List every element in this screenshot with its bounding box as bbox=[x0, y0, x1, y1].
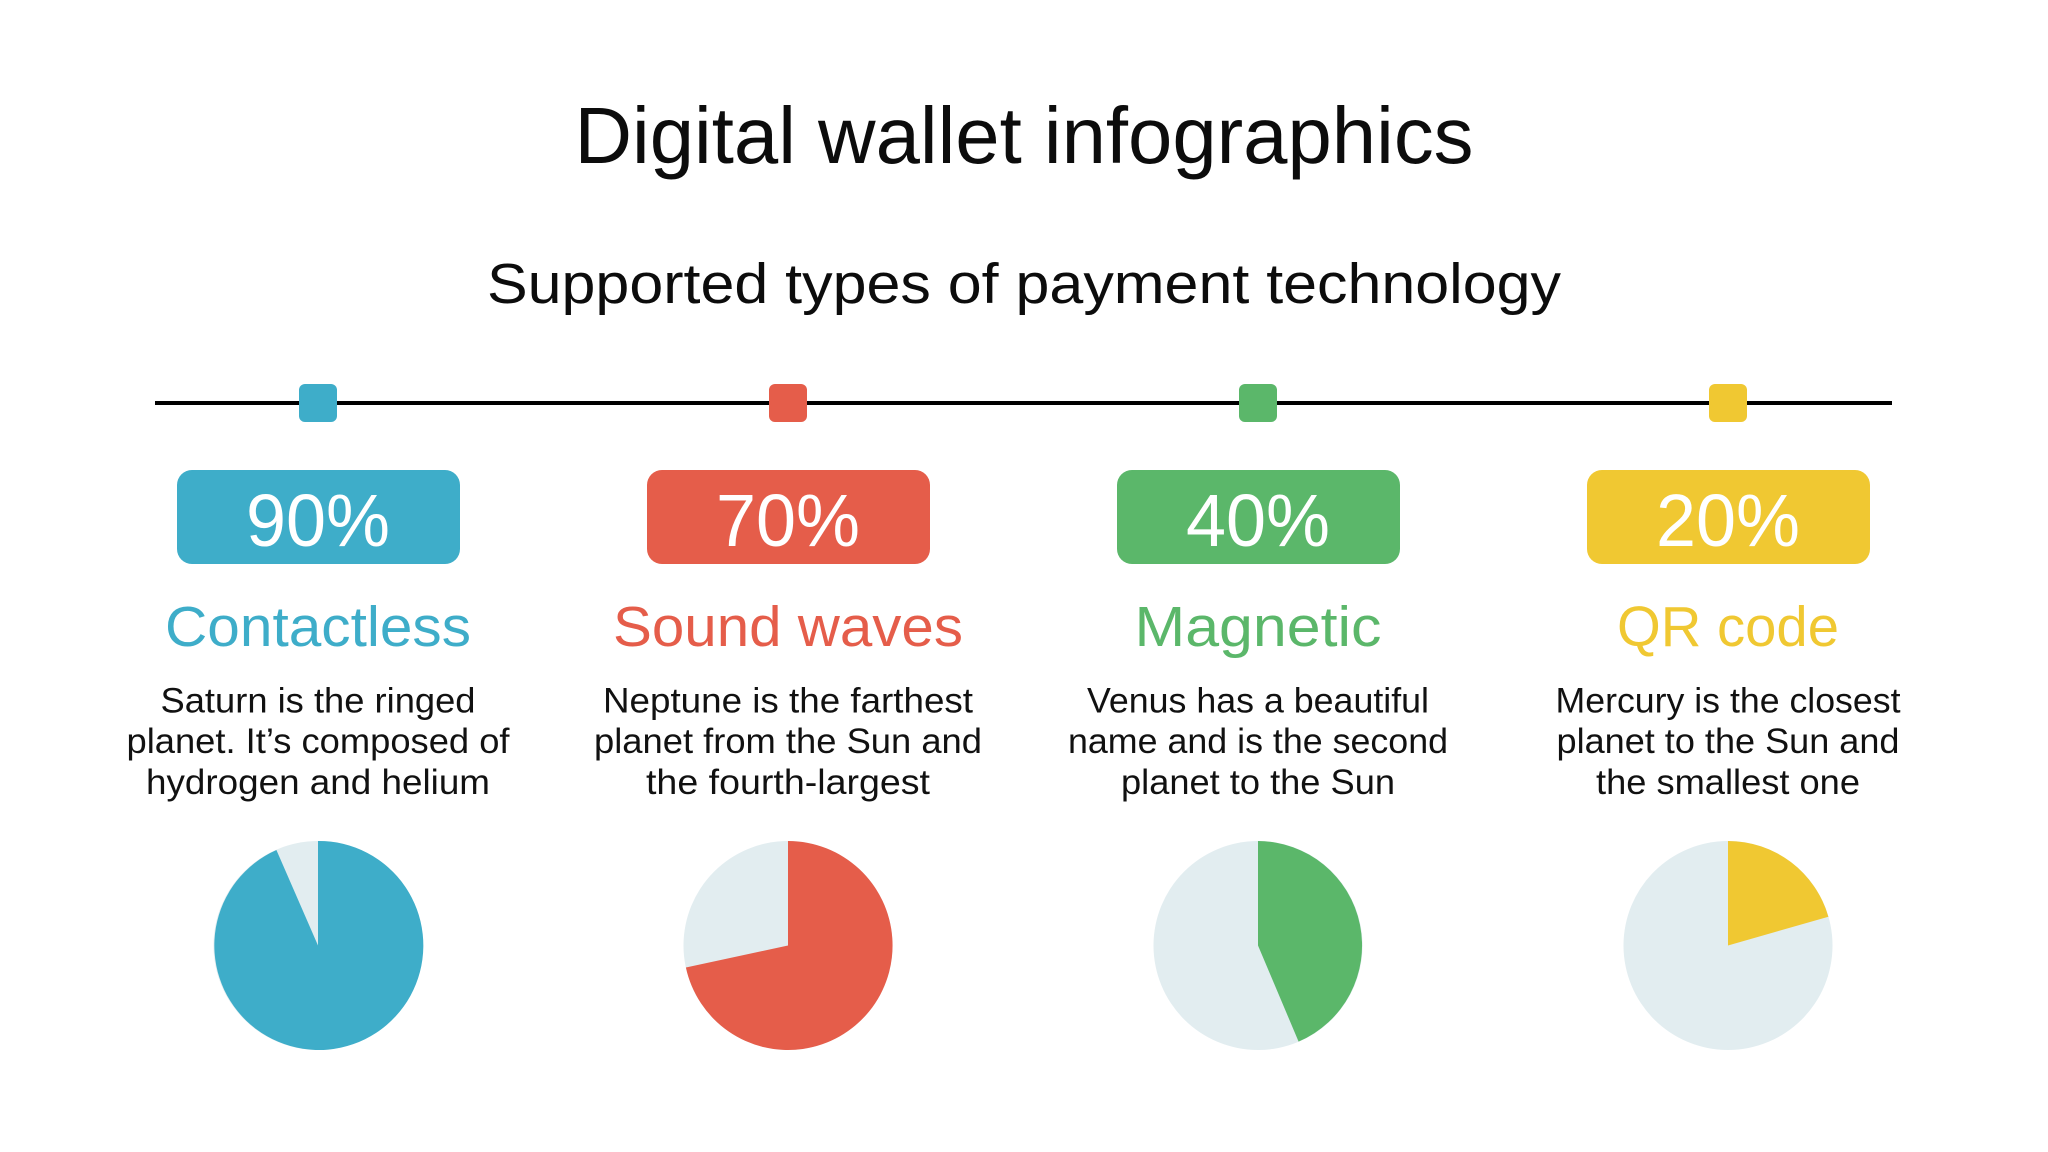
text block: Venus: planet to the Sun bbox=[1121, 763, 1395, 802]
heading: Magnetic: Magnetic bbox=[1134, 595, 1382, 659]
pie chart: 20% bbox=[1624, 841, 1832, 1050]
heading: Contactless: Contactless bbox=[165, 595, 471, 659]
percentage badge: 40%: 40% bbox=[1186, 479, 1330, 562]
text block: Neptune: Neptune is the farthest bbox=[603, 682, 973, 720]
percentage badge: 70% bbox=[647, 470, 930, 564]
text block: Neptune bbox=[594, 682, 982, 802]
text block: Saturn: hydrogen and helium bbox=[146, 763, 490, 802]
text block: Neptune: the fourth-largest bbox=[646, 763, 930, 802]
pie chart: 90% bbox=[214, 841, 423, 1050]
panel: contactless bbox=[126, 470, 510, 1050]
text block: Saturn: planet. It’s composed of bbox=[126, 722, 510, 761]
text block: Venus bbox=[1068, 682, 1448, 802]
text block: Saturn bbox=[126, 682, 510, 802]
percentage badge: 90% bbox=[177, 470, 460, 564]
text block: Venus: name and is the second bbox=[1068, 722, 1448, 761]
percentage badge: 90%: 90% bbox=[246, 479, 390, 562]
percentage badge: 40% bbox=[1117, 470, 1400, 564]
text block: Saturn: Saturn is the ringed bbox=[160, 682, 476, 720]
heading: QR code: QR code bbox=[1617, 595, 1839, 659]
text block: Mercury: the smallest one bbox=[1596, 763, 1860, 802]
subtitle: Supported types of payment technology bbox=[487, 252, 1562, 316]
panel: QR code bbox=[1556, 470, 1901, 1050]
percentage badge: 20% bbox=[1587, 470, 1870, 564]
panel: sound waves bbox=[594, 470, 982, 1050]
text block: Mercury: Mercury is the closest bbox=[1556, 682, 1901, 720]
title: Digital wallet infographics bbox=[574, 91, 1474, 180]
text block: Mercury bbox=[1556, 682, 1901, 802]
heading: Sound waves: Sound waves bbox=[613, 595, 963, 659]
text block: Neptune: planet from the Sun and bbox=[594, 722, 982, 761]
percentage badge: 20%: 20% bbox=[1656, 479, 1800, 562]
text block: Mercury: planet to the Sun and bbox=[1556, 722, 1900, 761]
percentage badge: 70%: 70% bbox=[716, 479, 860, 562]
timeline bbox=[155, 384, 1892, 422]
panel: magnetic bbox=[1068, 470, 1448, 1050]
text block: Venus: Venus has a beautiful bbox=[1087, 682, 1429, 720]
pie chart: 70% bbox=[684, 841, 893, 1050]
pie chart: 40% bbox=[1154, 841, 1362, 1050]
